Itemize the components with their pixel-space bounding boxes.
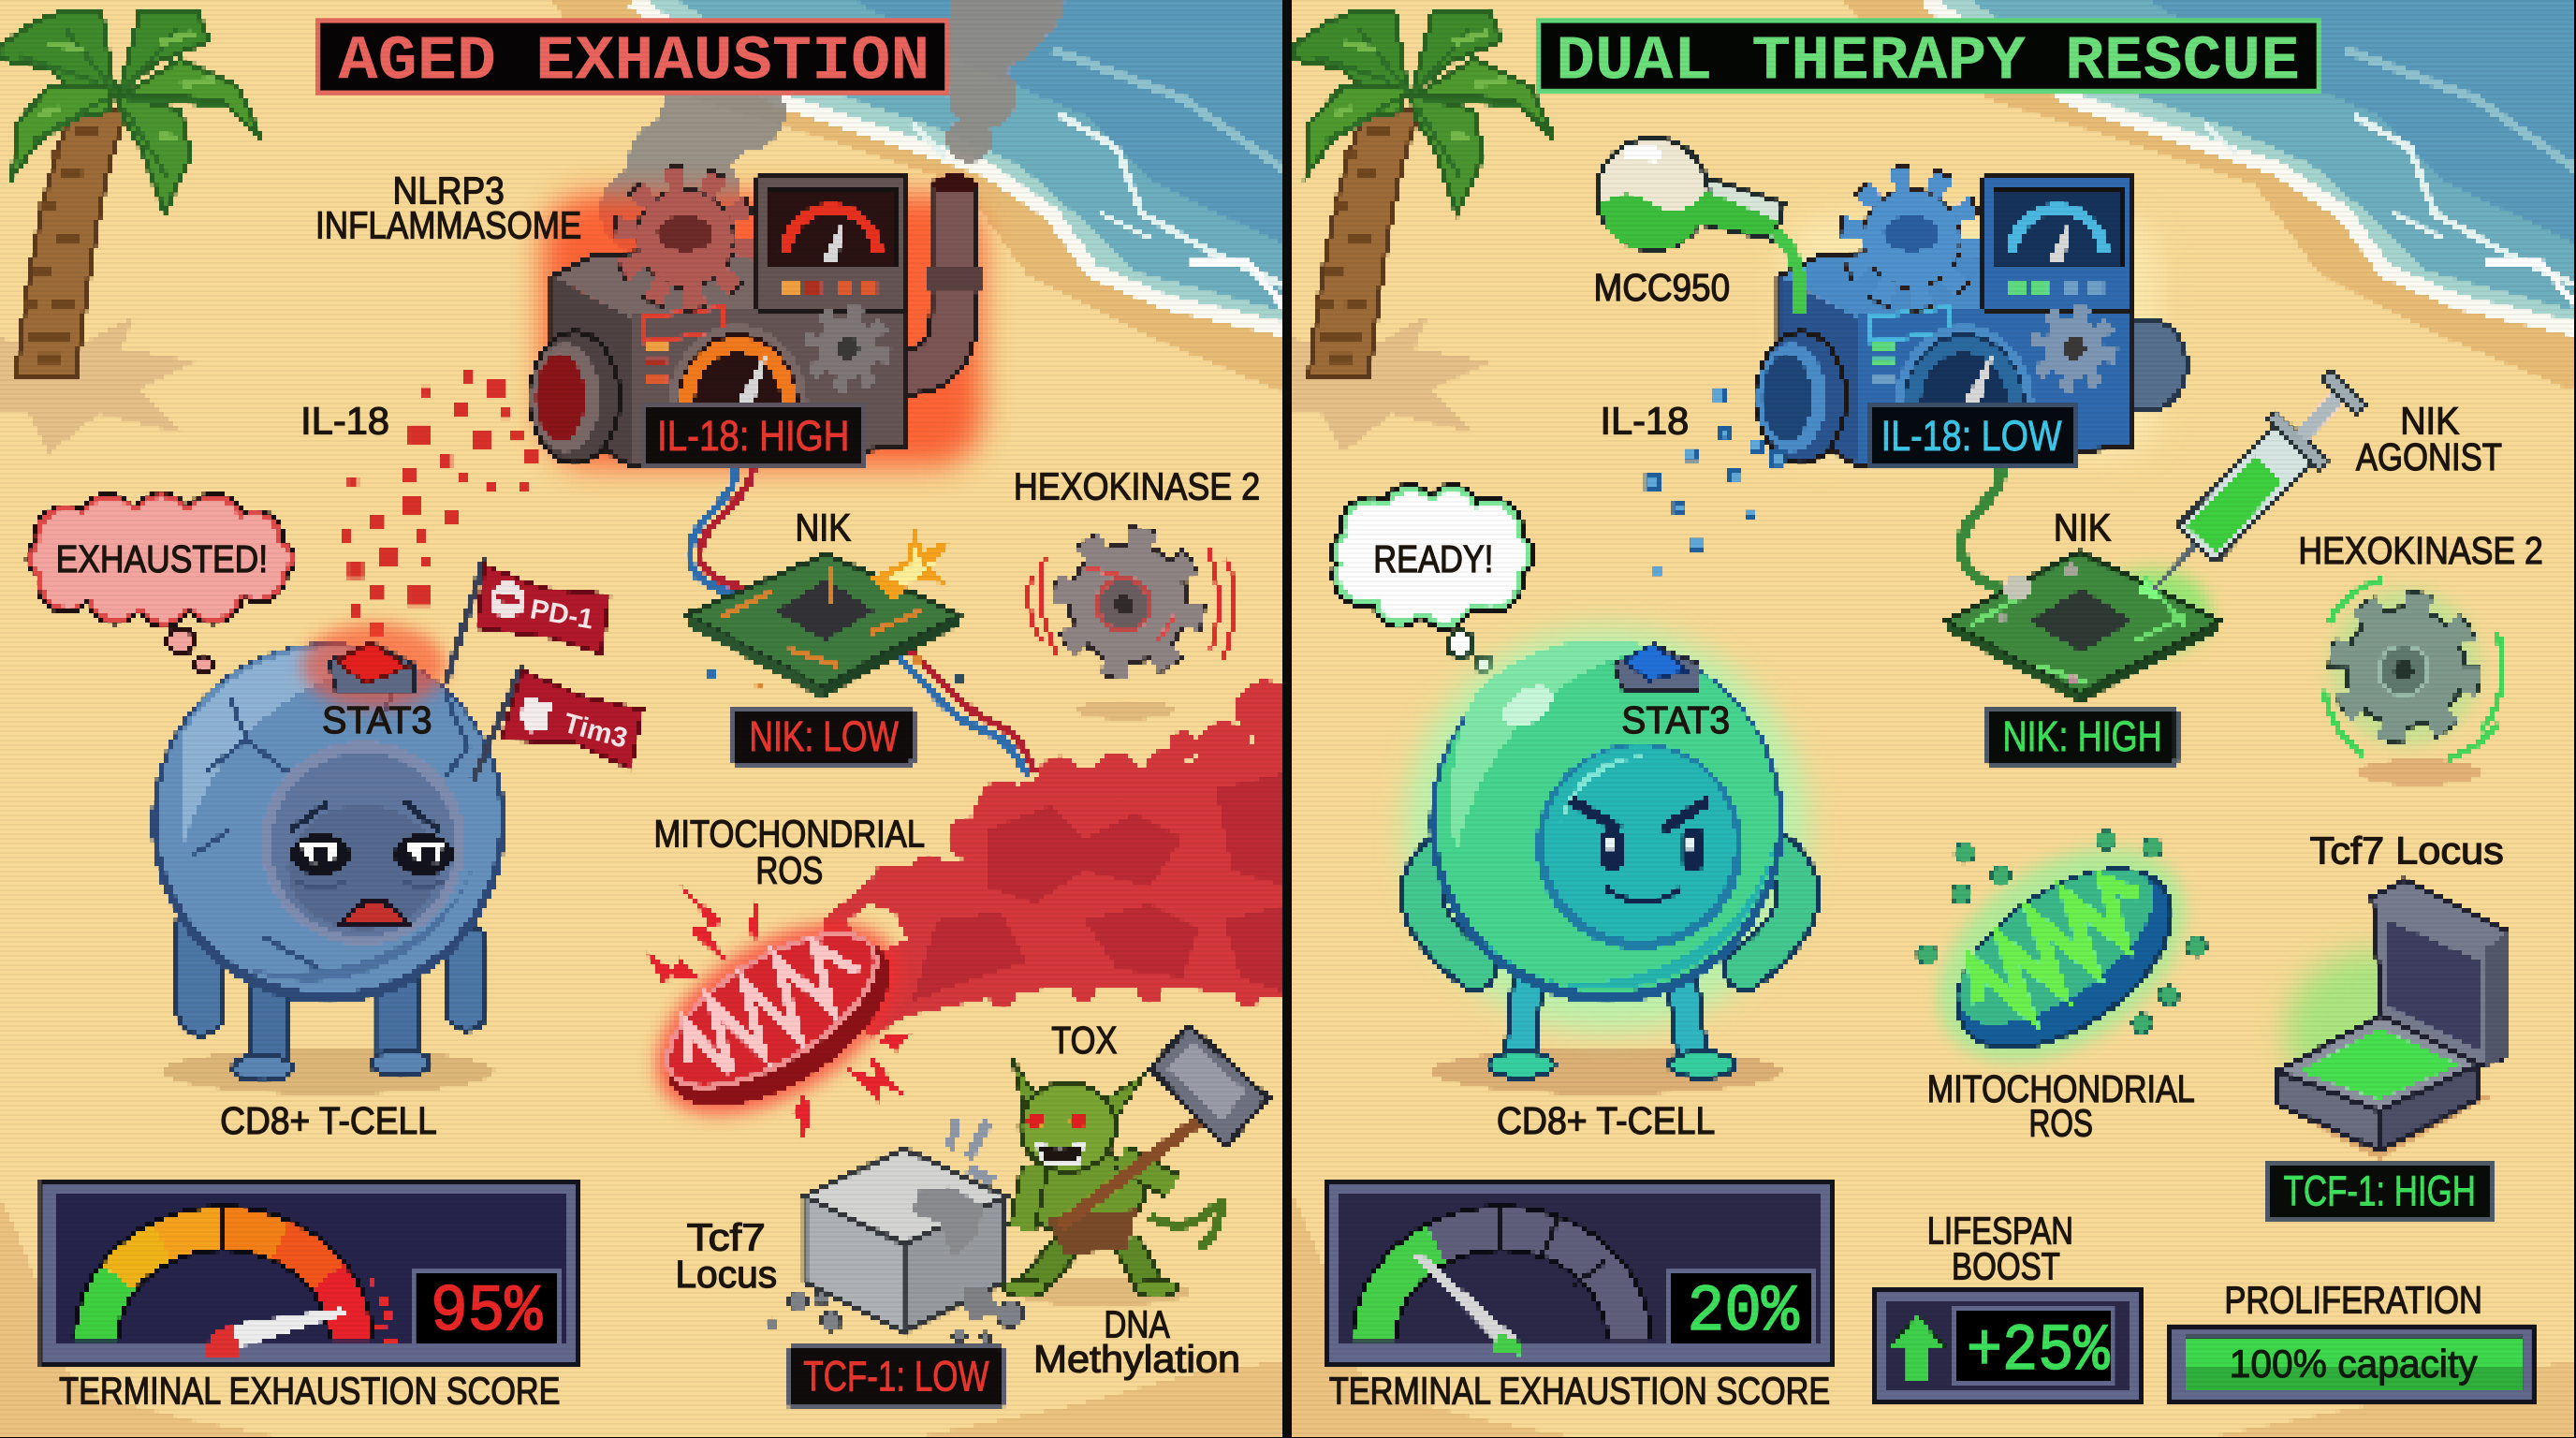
label: mitochondrial ROS (654, 813, 925, 891)
Tcf7 box glow (2285, 949, 2466, 1114)
label: Tcf7 locus: Tcf7 (687, 1216, 766, 1259)
chip box: IL-18 low (1868, 404, 2076, 466)
chip box: TCF-1 low (788, 1347, 1003, 1406)
gauge needle (205, 1308, 345, 1356)
green wire from machine to NIK (1961, 466, 2024, 594)
title banner: dual therapy rescue: DUAL THERAPY RESCUE (1556, 26, 2300, 97)
exhaustion score gauge frame (39, 1178, 580, 1365)
label: Tcf7 locus: Tcf7 Locus (2310, 829, 2504, 872)
icon: damaged mitochondrion (639, 901, 917, 1140)
exhaust tube (2108, 318, 2187, 411)
label: DNA methylation (1033, 1303, 1240, 1381)
label: NLRP3 inflammasome: INFLAMMASOME (315, 203, 581, 246)
icon: healthy hexokinase 2 gear (2324, 580, 2503, 759)
red machine glow (542, 194, 983, 466)
label: NLRP3 inflammasome: NLRP3 (392, 169, 505, 213)
status: IL-18 low: IL-18: LOW (1881, 412, 2062, 460)
T-cell ground shadow (1431, 1049, 1782, 1094)
panel text: dual therapy rescue (1329, 21, 2543, 1413)
flag: Tim3 (473, 666, 642, 781)
label: DNA methylation: Methylation (1033, 1338, 1240, 1381)
label: mitochondrial ROS: ROS (755, 848, 823, 891)
title banner: aged exhaustion: AGED EXHAUSTION (339, 26, 929, 97)
label: IL-18: IL-18 (300, 399, 389, 442)
label: terminal exhaustion score: TERMINAL EXHAUSTION SCORE (1329, 1370, 1830, 1413)
mitochondrion glow (622, 883, 931, 1154)
status: NIK low: NIK: LOW (749, 712, 899, 760)
panel text: aged exhaustion (56, 21, 1260, 1413)
icon: NIK agonist syringe (2125, 362, 2374, 617)
ATP particles (1917, 829, 2206, 1034)
label: mitochondrial ROS: ROS (2029, 1102, 2093, 1145)
exhaustion score gauge frame (1325, 1178, 1835, 1365)
label: IL-18: IL-18 (1600, 399, 1689, 442)
icon: palm tree (0, 10, 261, 376)
label: lifespan boost: BOOST (1952, 1244, 2060, 1287)
label: DNA methylation: DNA (1104, 1303, 1170, 1346)
sand gap in smoke (848, 903, 907, 949)
label: NIK: NIK (795, 506, 851, 549)
label: MCC950: MCC950 (1593, 266, 1730, 309)
panel: aged exhaustion (0, 0, 1295, 1438)
label: hexokinase 2: HEXOKINASE 2 (2298, 529, 2543, 572)
T-cell green glow (1403, 626, 1810, 1034)
T-cell ground shadow (163, 1049, 494, 1094)
hexokinase gear shadow (1076, 700, 1175, 720)
label: terminal exhaustion score: TERMINAL EXHAUSTION SCORE (59, 1370, 560, 1413)
icon: NLRP3 inflammasome machine (blue) (1757, 174, 2133, 466)
label: STAT3: STAT3 (1621, 698, 1730, 741)
icon: palm tree (1293, 10, 1554, 376)
callout text: exhausted: EXHAUSTED! (56, 537, 268, 580)
icon: MCC950 flask pouring (1597, 138, 1801, 312)
label: mitochondrial ROS: MITOCHONDRIAL (654, 813, 925, 856)
label: CD8+ T-cell: CD8+ T-CELL (220, 1099, 437, 1142)
bubble: ready (1334, 488, 1531, 672)
goblin shadow (1010, 1277, 1191, 1306)
impact marks (944, 1117, 996, 1186)
hexokinase gear shadow (2356, 759, 2481, 785)
label: CD8+ T-cell: CD8+ T-CELL (1497, 1099, 1715, 1142)
flag text: PD-1: PD-1 (528, 594, 596, 636)
chip box: TCF-1 high (2267, 1162, 2492, 1221)
icon: healthy mitochondrion (1926, 834, 2203, 1083)
icon: STAT3 switch (1614, 644, 1699, 690)
beach background with ocean (1293, 0, 2576, 1438)
IL-18 red particles (340, 370, 540, 638)
label: NIK agonist: NIK (2400, 399, 2459, 442)
lightning bolts (644, 884, 912, 1142)
label: NLRP3 inflammasome (315, 169, 581, 246)
label: TOX: TOX (1051, 1019, 1118, 1062)
gear glow (2330, 588, 2481, 746)
panel art: dual therapy rescue (1293, 0, 2576, 1438)
label: hexokinase 2: HEXOKINASE 2 (1014, 465, 1260, 508)
label: STAT3: STAT3 (322, 698, 432, 741)
icon: damaged hexokinase 2 gear (1029, 540, 1235, 666)
machine pale glow (1782, 213, 2160, 460)
overload sparks (368, 1278, 398, 1344)
status: IL-18 high: IL-18: HIGH (657, 412, 849, 460)
panel divider (1282, 0, 1294, 1438)
label: mitochondrial ROS (1927, 1067, 2195, 1145)
flag text: Tim3: Tim3 (560, 708, 631, 755)
readout: 95%: 95% (431, 1276, 543, 1350)
label: NIK agonist: AGONIST (2356, 435, 2502, 478)
label: NIK agonist (2356, 399, 2502, 478)
callout text: ready: READY! (1373, 537, 1493, 580)
IL-18 blue particles (1647, 388, 1784, 577)
icon: damaged NIK circuit board (687, 526, 964, 700)
rubble around Tcf7 cube (767, 1292, 1023, 1343)
readout: 20%: 20% (1687, 1276, 1800, 1350)
proliferation bar frame (2169, 1323, 2535, 1405)
mitochondrion glow (1898, 803, 2226, 1107)
icon: exhausted CD8+ T-cell (151, 642, 506, 1081)
chip box: NIK low (733, 708, 914, 764)
chip box: IL-18 high (642, 404, 864, 466)
beach background with ocean (0, 0, 1288, 1438)
label: mitochondrial ROS: MITOCHONDRIAL (1927, 1067, 2195, 1110)
icon: open Tcf7 locus box (2277, 879, 2507, 1151)
chip box: NIK high (1986, 708, 2177, 764)
smoke plumes (600, 0, 1064, 255)
lifespan boost box (1871, 1288, 2143, 1405)
STAT3 switch glow (302, 623, 446, 708)
box shadow (2274, 1051, 2489, 1160)
gauge needle (1412, 1252, 1521, 1356)
bar text: 100% capacity: 100% capacity (2230, 1342, 2478, 1386)
board glow (2093, 568, 2211, 654)
icon: rescued CD8+ T-cell (1422, 639, 1798, 1078)
darker smoke patches (912, 772, 1288, 1003)
pipe on machine (903, 174, 983, 372)
wires from machine to NIK (690, 466, 1035, 775)
red ROS cloud (822, 681, 1295, 1038)
icon: STAT3 switch (329, 642, 414, 694)
bubble: exhausted (30, 494, 292, 672)
icon: healthy NIK circuit board (1945, 552, 2219, 703)
label: Tcf7 locus (675, 1216, 777, 1296)
readout: +25%: +25% (1967, 1315, 2110, 1389)
label: NIK: NIK (2054, 506, 2111, 549)
gauge arc: score (1374, 1208, 1629, 1341)
icon: Tcf7 locus stone cube (805, 1149, 1005, 1332)
panel art: aged exhaustion (0, 0, 1295, 1438)
label: lifespan boost: LIFESPAN (1927, 1210, 2073, 1253)
status: TCF-1 low: TCF-1: LOW (803, 1353, 989, 1401)
flag: PD-1 (446, 559, 609, 685)
label: lifespan boost (1927, 1210, 2073, 1287)
status: NIK high: NIK: HIGH (2002, 712, 2162, 760)
gauge arc: score (96, 1208, 351, 1341)
status: TCF-1 high: TCF-1: HIGH (2284, 1167, 2476, 1214)
panel: dual therapy rescue (1293, 0, 2576, 1438)
icon: TOX goblin with hammer (1003, 1025, 1268, 1297)
icon: NLRP3 inflammasome machine (531, 174, 907, 466)
label: Tcf7 locus: Locus (675, 1253, 777, 1296)
icon: up arrow (1889, 1314, 1945, 1380)
label: proliferation: PROLIFERATION (2224, 1278, 2482, 1321)
